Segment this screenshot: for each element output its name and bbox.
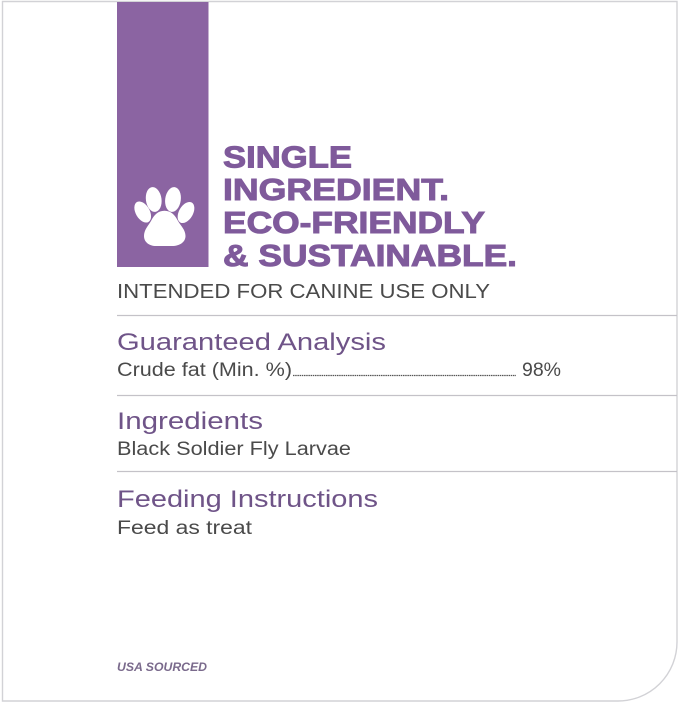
heading: & SUSTAINABLE. xyxy=(223,238,517,273)
purple banner with paw icon xyxy=(117,2,208,267)
footer: usa sourced: USA SOURCED xyxy=(117,660,207,674)
section: ingredients: Ingredients xyxy=(117,408,263,435)
section: ingredients xyxy=(117,408,351,460)
icon: paw xyxy=(131,186,198,246)
section: guaranteed analysis: Crude fat (Min. %) xyxy=(117,360,292,381)
section: feeding instructions: Feeding Instructions xyxy=(117,486,378,513)
section: feeding instructions xyxy=(117,486,378,539)
subheading: canine use: INTENDED FOR CANINE USE ONLY xyxy=(117,281,490,303)
heading: ECO-FRIENDLY xyxy=(223,205,485,240)
section: guaranteed analysis xyxy=(117,329,561,381)
section: feeding instructions: Feed as treat xyxy=(117,518,253,539)
heading: SINGLE xyxy=(223,140,352,174)
section: guaranteed analysis: Guaranteed Analysis xyxy=(117,329,386,356)
heading xyxy=(223,140,517,273)
heading: INGREDIENT. xyxy=(223,172,449,207)
section: guaranteed analysis: 98% xyxy=(522,360,561,381)
section: ingredients: Black Soldier Fly Larvae xyxy=(117,439,351,460)
